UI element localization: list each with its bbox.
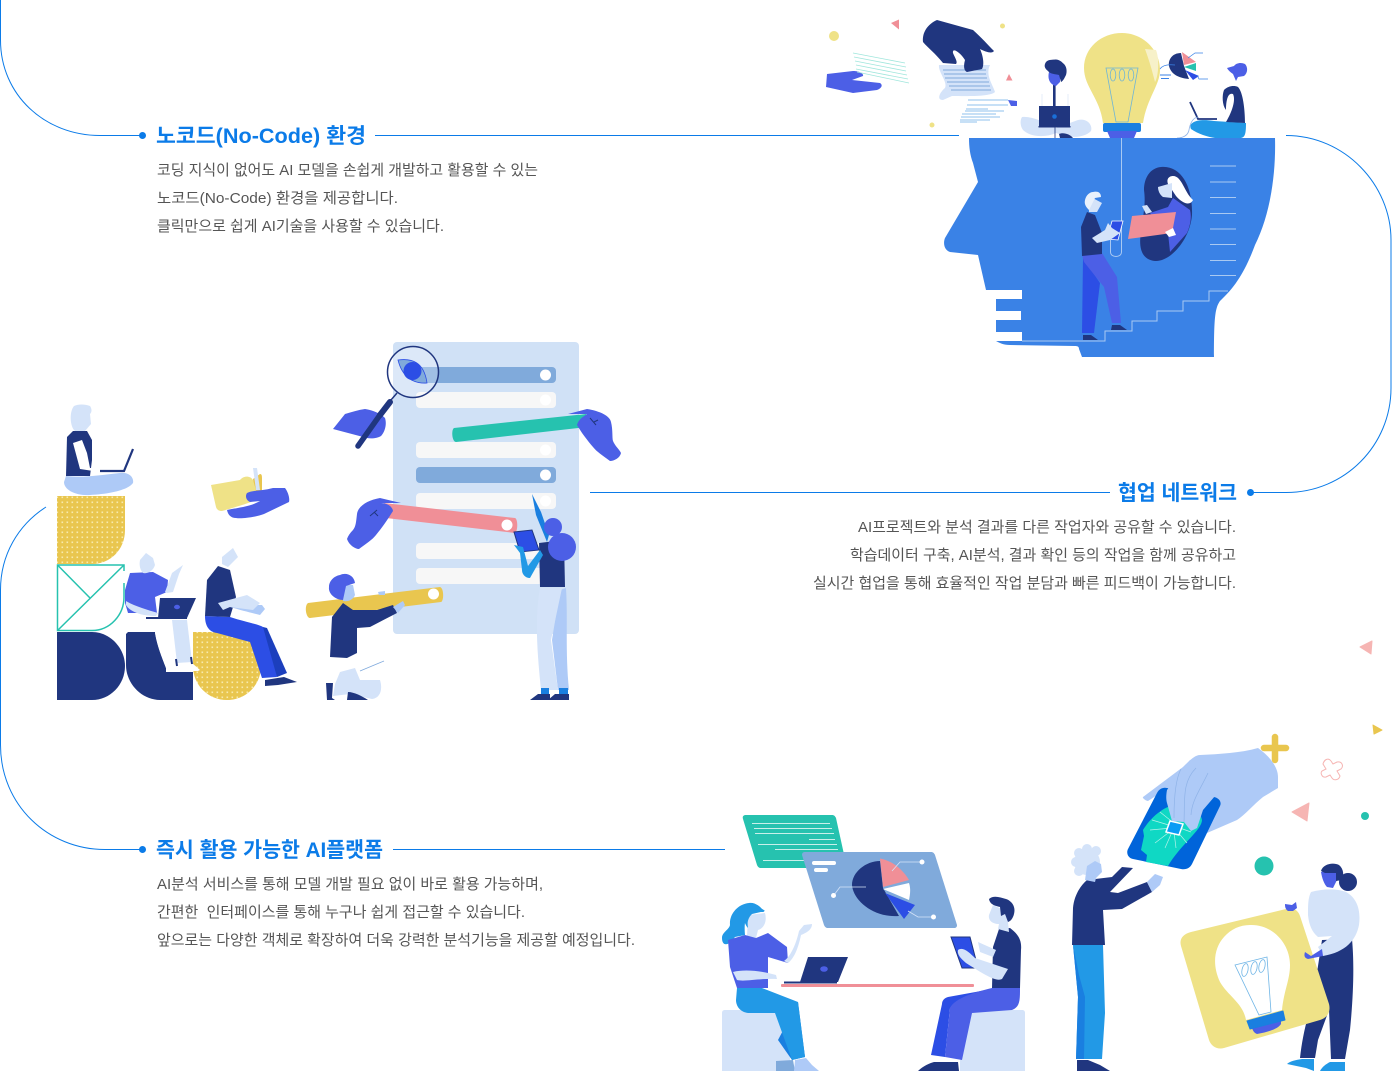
person: older man reaching for card <box>1071 844 1163 1071</box>
icon: open hand and document lines <box>826 53 909 93</box>
heading: collaboration: 협업 네트워크 <box>1118 482 1237 505</box>
body text: AI platform: 간편한 인터페이스를 통해 누구나 쉽게 접근할 수 있습니다. <box>157 904 525 921</box>
bullet dot <box>139 846 146 853</box>
icon: brain chip card <box>1127 788 1221 869</box>
pink bar and hand <box>347 498 517 549</box>
person: seated with laptop, blue legs <box>1177 63 1247 138</box>
illustration: head with idea bulb and people <box>826 20 1275 357</box>
icon: fingers of large hand over card <box>1166 760 1230 831</box>
section: collaboration network <box>813 482 1254 592</box>
stool left <box>722 1010 790 1071</box>
confetti: triangles and dots <box>1254 641 1382 876</box>
person: seated with laptop <box>1021 59 1091 138</box>
body text: collaboration: 실시간 협업을 통해 효율적인 작업 분담과 빠른 피드백이 가능합니다. <box>813 575 1236 592</box>
body text: collaboration: AI프로젝트와 분석 결과를 다른 작업자와 공유할 수 있습니다. <box>858 519 1236 536</box>
table line <box>781 984 974 987</box>
form rows <box>416 367 556 584</box>
section: ready-to-use AI platform <box>139 839 635 949</box>
panel: pie chart card <box>802 852 957 928</box>
stool right <box>960 1010 1025 1071</box>
magnifying glass with eye and hand <box>333 346 438 446</box>
person: crouching man with yellow bar <box>306 574 443 700</box>
panel: teal text card <box>743 815 847 868</box>
icon: yellow plus <box>1264 737 1286 760</box>
body text: AI platform: AI분석 서비스를 통해 모델 개발 필요 없이 바로 활용 가능하며, <box>157 876 543 893</box>
body text: no-code: 노코드(No-Code) 환경을 제공합니다. <box>157 190 398 207</box>
teal bar and hand <box>452 409 621 461</box>
body text: no-code: 클릭만으로 쉽게 AI기술을 사용할 수 있습니다. <box>157 218 444 235</box>
body text: no-code <box>157 162 538 235</box>
block: yellow dotted half circle <box>193 632 261 700</box>
heading: no-code: 노코드(No-Code) 환경 <box>156 125 366 148</box>
person: woman pointing with tablet <box>514 494 576 700</box>
connector line: flowing through all sections <box>0 0 1391 850</box>
person: seated man right <box>918 897 1021 1071</box>
block: yellow dotted D top <box>57 496 125 564</box>
icon: outlined pink plus <box>1321 759 1342 780</box>
body text: collaboration: 학습데이터 구축, AI분석, 결과 확인 등의 작업을 함께 공유하고 <box>850 547 1236 564</box>
stairs inside head <box>1022 138 1236 341</box>
body text: AI platform <box>157 876 635 949</box>
section: no-code environment <box>139 125 538 235</box>
block: navy D <box>57 632 125 700</box>
block: teal envelope outline <box>58 565 124 630</box>
icon: hand holding yellow folder <box>211 468 289 518</box>
body text: collaboration <box>813 519 1236 592</box>
person: top woman sitting with laptop <box>64 404 133 495</box>
icon: yellow card with white bulb <box>1180 902 1330 1049</box>
icon: text lines under paper <box>960 100 1017 122</box>
decorative confetti <box>829 20 1012 128</box>
person: man with laptop on block <box>125 553 200 671</box>
body text: no-code: 코딩 지식이 없어도 AI 모델을 손쉽게 개발하고 활용할 수 있는 <box>157 162 538 179</box>
icon: navy hand holding paper <box>923 20 995 100</box>
body text: AI platform: 앞으로는 다양한 객체로 확장하여 더욱 강력한 분석기능을 제공할 예정입니다. <box>157 932 635 949</box>
head silhouette <box>944 138 1275 357</box>
block: navy U <box>126 632 193 700</box>
illustration: team reviewing data charts <box>722 641 1382 1071</box>
heading: AI platform: 즉시 활용 가능한 AI플랫폼 <box>156 839 383 862</box>
person: man on stairs with tablet <box>1081 192 1127 340</box>
bullet dot <box>1247 489 1254 496</box>
icon: mini pie chart <box>1160 52 1208 80</box>
person: seated woman left <box>722 903 819 1071</box>
illustration: building a form with blocks and people <box>57 342 621 700</box>
icon: palm of large hand behind card <box>1143 748 1278 833</box>
person: man seated on yellow block <box>205 548 297 686</box>
icon: large idea bulb <box>1084 33 1160 138</box>
bullet dot <box>139 132 146 139</box>
panel: form board <box>393 342 579 634</box>
person: woman in oval portal holding pink card <box>1128 167 1193 261</box>
person: woman holding bulb card <box>1287 864 1359 1071</box>
icon: laptop <box>784 957 848 984</box>
